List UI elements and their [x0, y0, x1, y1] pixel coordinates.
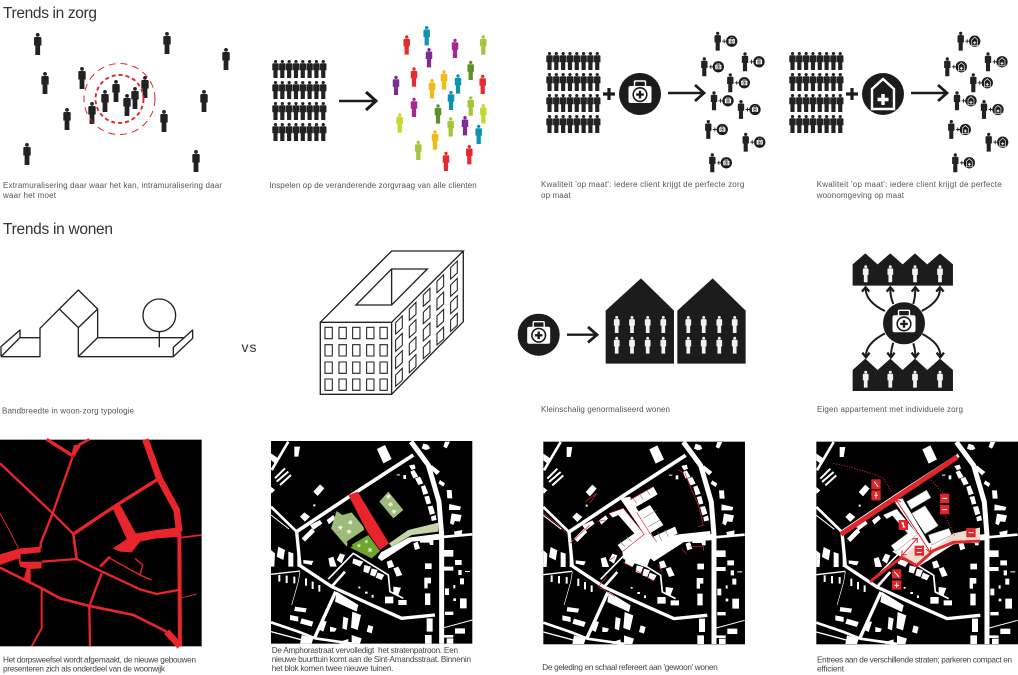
people grid — [546, 52, 600, 133]
caption: De geleding en schaal refereert aan 'gewoon' wonen — [542, 663, 718, 672]
panel: kwaliteit op maat wonen — [789, 32, 1008, 200]
paved areas — [902, 528, 980, 563]
gardens — [331, 492, 403, 547]
caption: nieuwe buurttuin komt aan de Sint-Amandsstraat. Binnenin — [272, 655, 471, 664]
red outlines — [543, 470, 703, 597]
caption — [3, 656, 196, 674]
icon: medical kit — [518, 314, 560, 356]
heading: Trends in zorg: Trends in zorg — [3, 5, 97, 22]
vs: vs — [242, 339, 256, 355]
arrow — [567, 327, 597, 342]
panel: kleinschalig wonen — [518, 278, 746, 414]
caption: Kwaliteit 'op maat': iedere client krijgt de perfecte zorg — [541, 180, 744, 189]
new buildings — [883, 490, 952, 552]
building divisions — [620, 490, 668, 547]
people with kits — [701, 32, 765, 172]
panel: kwaliteit op maat zorg — [541, 32, 765, 200]
new buildings — [609, 487, 678, 552]
caption: het blok komen twee nieuwe tuinen. — [272, 664, 393, 673]
residents — [614, 316, 738, 354]
panel: map entrees — [816, 442, 1018, 674]
arrow — [668, 85, 704, 101]
panel: veranderende zorgvraag — [269, 26, 487, 190]
panel: map geleding — [542, 442, 745, 672]
caption — [817, 656, 1012, 674]
street map with new buildings — [543, 442, 745, 644]
neighbourhood garden — [389, 523, 438, 547]
house rows — [853, 253, 953, 391]
line drawing: apartment block — [320, 251, 463, 394]
two houses — [606, 278, 746, 364]
caption: presenteren zich als onderdeel van de woonwijk — [3, 664, 166, 674]
people with houses — [944, 32, 1008, 172]
black map with red streets — [0, 439, 202, 646]
caption: Extramuralisering daar waar het kan, intramuralisering daar — [3, 181, 222, 190]
garden trees — [338, 494, 396, 552]
icon: house with cross — [862, 73, 904, 115]
red streets — [841, 457, 957, 534]
residents — [863, 265, 943, 388]
panel: bandbreedte — [1, 251, 463, 416]
coloured people — [393, 26, 487, 171]
street map with routes — [816, 442, 1018, 644]
heading: Trends in wonen: Trends in wonen — [3, 221, 113, 238]
street map with gardens — [271, 441, 472, 644]
icon: medical kit — [883, 302, 925, 344]
arrow — [911, 85, 947, 101]
icon: medical kit — [619, 73, 661, 115]
panel: map Amphorastraat — [271, 441, 472, 673]
caption: Eigen appartement met individuele zorg — [817, 405, 963, 414]
panel: map street network — [0, 439, 202, 674]
line drawing: house and tree — [1, 290, 193, 357]
caption — [2, 181, 222, 200]
dashed red circles — [84, 64, 155, 134]
people grid — [272, 60, 326, 141]
caption: Kleinschalig genormaliseerd wonen — [541, 405, 670, 414]
plus — [846, 88, 858, 100]
panel: eigen appartement — [817, 253, 963, 414]
caption: Het dorpsweefsel wordt afgemaakt, de nieuwe gebouwen — [3, 656, 196, 664]
arrows — [862, 287, 944, 357]
caption: woonomgeving op maat — [816, 191, 905, 200]
new street — [348, 492, 389, 550]
caption: waar het moet — [2, 191, 57, 200]
black building — [349, 531, 366, 547]
plaza and new street — [620, 497, 712, 568]
caption: Kwaliteit 'op maat': iedere client krijgt de perfecte — [817, 180, 1002, 189]
plaza and new street — [892, 498, 980, 567]
arrow — [339, 92, 376, 110]
entrance icons — [871, 479, 976, 590]
caption — [816, 180, 1002, 200]
caption — [272, 646, 471, 673]
caption: Bandbreedte in woon-zorg typologie — [2, 406, 135, 416]
scattered people — [23, 32, 230, 172]
people grid — [789, 52, 843, 133]
caption: Entrees aan de verschillende straten; parkeren compact en — [817, 656, 1012, 664]
caption — [541, 180, 744, 200]
caption: efficient — [817, 664, 845, 674]
caption: De Amphorastraat vervolledigt het stratenpatroon. Een — [272, 646, 458, 655]
route arrows — [833, 463, 955, 555]
plus — [603, 88, 615, 100]
caption: op maat — [541, 191, 571, 200]
caption: Inspelen op de veranderende zorgvraag van alle clienten — [269, 181, 477, 190]
panel: extramuralisering — [2, 32, 230, 200]
